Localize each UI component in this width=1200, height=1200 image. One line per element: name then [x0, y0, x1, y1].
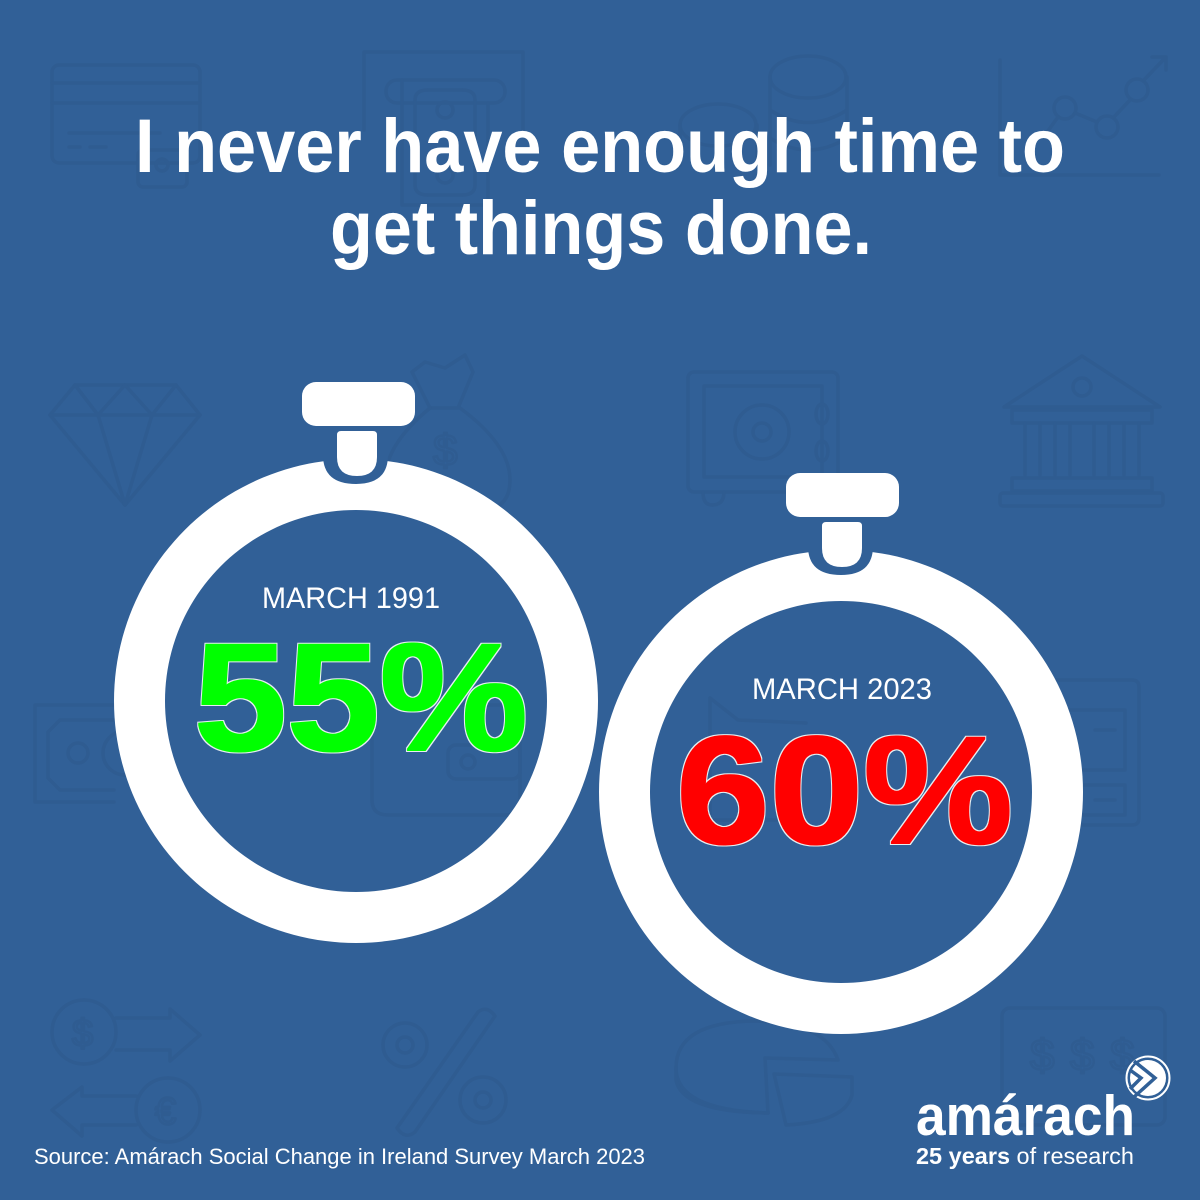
icon: paper note	[710, 698, 806, 820]
icon: banknote	[35, 705, 147, 802]
icon: wallet	[372, 705, 520, 815]
stem	[822, 522, 862, 567]
icon: diamond	[50, 385, 200, 505]
logo	[916, 1056, 1170, 1169]
icon: cash register	[1050, 680, 1139, 825]
value 55%: 55%	[194, 612, 528, 783]
logo icon: chevrons in circle	[1126, 1056, 1170, 1100]
stopwatch: March 2023	[599, 473, 1083, 1034]
title	[135, 104, 1065, 271]
icon: money note with dollars: $	[1030, 1031, 1054, 1080]
icon: bank	[1000, 356, 1163, 506]
stopwatch ring	[114, 459, 598, 943]
icon: money note with dollars	[1002, 1008, 1165, 1125]
icon: coin stacks	[680, 56, 847, 165]
icon: cash machine	[364, 52, 523, 205]
date label: MARCH 1991	[262, 582, 440, 615]
icon: credit card	[52, 65, 200, 187]
title line 2: get things done.	[330, 186, 872, 271]
crown	[302, 382, 415, 426]
icon: pie chart	[676, 1021, 852, 1125]
icon: safe	[688, 372, 838, 505]
icon: line chart	[1000, 57, 1166, 175]
logo wordmark: amárach	[916, 1084, 1135, 1148]
icon: percent	[383, 1009, 506, 1135]
stopwatch: March 1991	[114, 382, 598, 943]
icon: money note with dollars: $	[1070, 1031, 1094, 1080]
icon: money note with dollars: $	[1110, 1031, 1134, 1080]
icon: money bag	[385, 355, 510, 510]
icon: currency exchange	[52, 1000, 200, 1142]
crown	[786, 473, 899, 517]
stopwatch ring	[599, 550, 1083, 1034]
stem notch	[808, 541, 873, 575]
icon: money bag: $	[433, 426, 457, 475]
logo tagline: 25 years of research	[916, 1143, 1134, 1169]
date label: MARCH 2023	[752, 673, 932, 706]
icon: currency exchange: €	[155, 1091, 176, 1133]
source note: Source: Amárach Social Change in Ireland Survey March 2023	[34, 1144, 645, 1169]
stem	[337, 431, 377, 476]
icon: currency exchange: $	[72, 1013, 93, 1055]
title line 1: I never have enough time to	[135, 104, 1065, 189]
value 60%: 60%	[676, 705, 1013, 876]
stem notch	[323, 450, 388, 484]
